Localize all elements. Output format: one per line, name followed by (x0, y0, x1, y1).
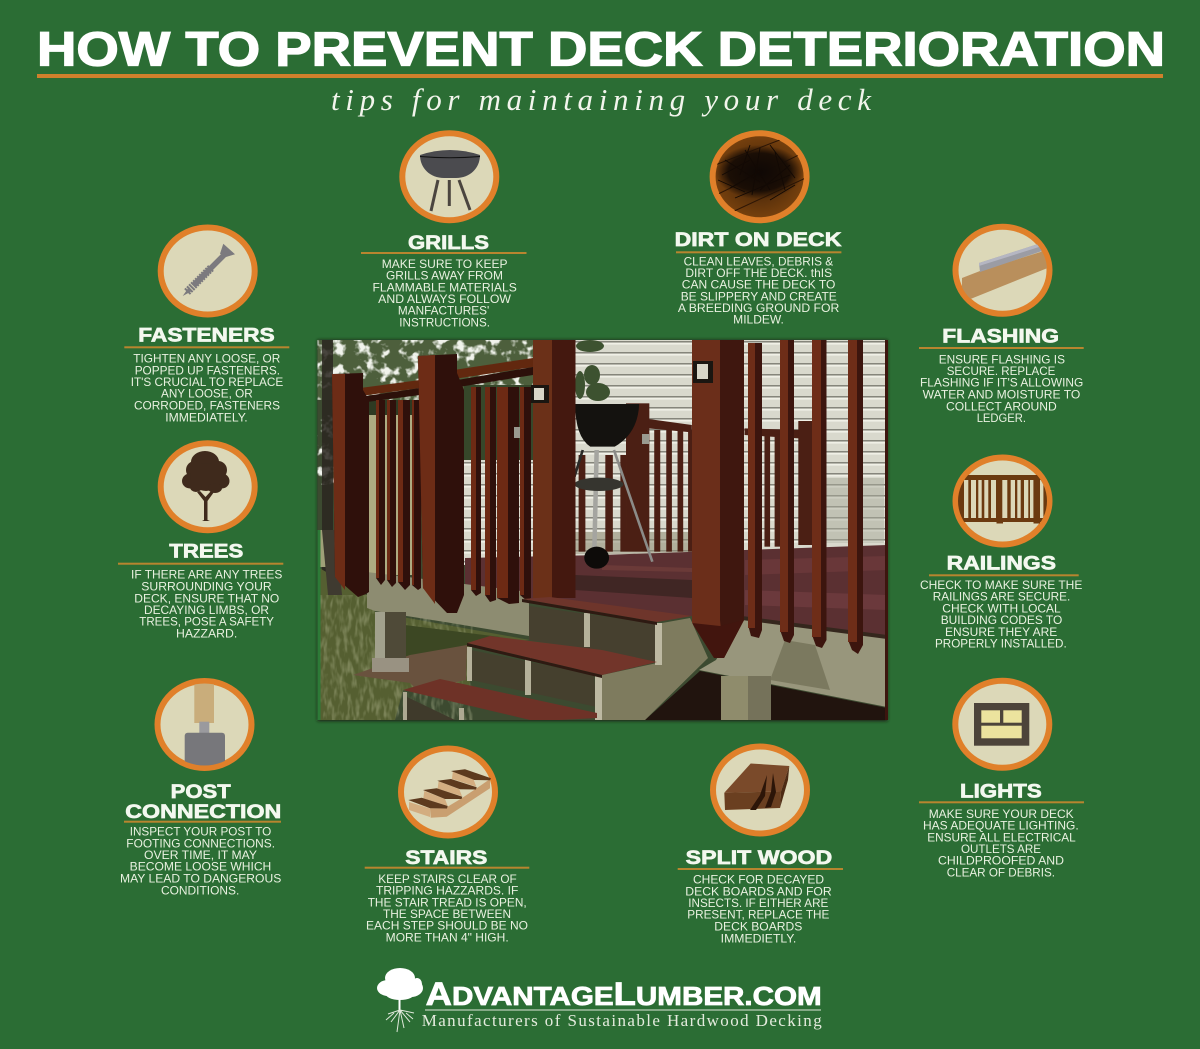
icon: dirt on planks (713, 133, 810, 220)
panel: split wood (678, 746, 843, 945)
text: trees tip: DECAYING LIMBS, OR (144, 603, 269, 617)
heading: flashing: FLASHING (942, 325, 1059, 347)
text: fasteners tip: IT'S CRUCIAL TO REPLACE (131, 375, 283, 389)
text: trees tip (131, 568, 282, 640)
text: fasteners tip: CORRODED, FASTENERS (134, 399, 280, 413)
icon: split board (713, 746, 807, 834)
text: split wood tip: INSECTS. IF EITHER ARE (688, 896, 828, 910)
grill (574, 404, 652, 569)
icon: screw (161, 228, 255, 314)
text: flashing tip: FLASHING IF IT'S ALLOWING (920, 376, 1083, 390)
text: split wood tip: PRESENT, REPLACE THE (687, 908, 829, 922)
siding (575, 340, 888, 560)
heading: lights: LIGHTS (960, 781, 1042, 803)
icon: deck light (955, 681, 1049, 768)
text: railings tip: CHECK TO MAKE SURE THE (920, 578, 1082, 592)
text: stairs tip: TRIPPING HAZZARDS. IF (376, 884, 518, 898)
text: flashing tip (920, 352, 1083, 425)
panel: flashing (919, 227, 1084, 425)
heading: dirt on deck: DIRT ON DECK (675, 229, 841, 251)
text: post tip: BECOME LOOSE WHICH (130, 860, 271, 874)
far railing (579, 403, 813, 552)
text: fasteners tip: POPPED UP FASTENERS. (135, 363, 280, 377)
text: dirt tip: A BREEDING GROUND FOR (678, 301, 840, 315)
logo: Advantage Lumber (377, 968, 822, 1032)
heading: stairs: STAIRS (405, 847, 487, 869)
text: fasteners tip: IMMEDIATELY. (165, 410, 248, 424)
text: split wood tip (685, 873, 832, 945)
heading: split wood: SPLIT WOOD (686, 847, 832, 869)
tagline: Manufacturers of Sustainable Hardwood Decking (422, 1011, 822, 1030)
tree trunk (322, 530, 342, 595)
icon: grill (402, 133, 496, 220)
panel: fasteners (124, 228, 289, 424)
text: fasteners tip: ANY LOOSE, OR (161, 387, 253, 401)
text: grills tip (372, 257, 517, 329)
text: split wood tip: CHECK FOR DECAYED (693, 873, 824, 887)
text: railings tip: CHECK WITH LOCAL (942, 601, 1061, 615)
near railing: left rails (345, 358, 533, 404)
text: fasteners tip: TIGHTEN ANY LOOSE, OR (133, 352, 281, 366)
support post and footing (372, 612, 409, 672)
title: HOW TO PREVENT DECK DETERIORATION (37, 22, 1165, 76)
text: dirt tip: CLEAN LEAVES, DEBRIS & (684, 254, 833, 268)
text: railings tip: ENSURE THEY ARE (945, 625, 1057, 639)
grass and ground (318, 567, 530, 720)
text: railings tip: RAILINGS ARE SECURE. (933, 590, 1070, 604)
text: lights tip: CLEAR OF DEBRIS. (947, 865, 1055, 879)
sprig of leaves (575, 340, 610, 401)
text: flashing tip: ENSURE FLASHING IS (939, 352, 1065, 366)
text: dirt tip: DIRT OFF THE DECK. thIS (685, 266, 832, 280)
text: post tip: MAY LEAD TO DANGEROUS (120, 871, 281, 885)
heading: railings: RAILINGS (947, 552, 1056, 574)
text: post tip: CONDITIONS. (161, 883, 239, 897)
panel: lights (919, 681, 1084, 879)
text: trees tip: TREES, POSE A SAFETY (139, 615, 274, 629)
subtitle: tips for maintaining your deck (331, 82, 872, 117)
panel: dirt on deck (675, 133, 841, 327)
near railing: balusters (376, 387, 531, 604)
text: split wood tip: IMMEDIETLY. (721, 931, 796, 945)
icon: railing (956, 458, 1050, 544)
text: trees tip: DECK, ENSURE THAT NO (134, 591, 279, 605)
text: trees tip: IF THERE ARE ANY TREES (131, 568, 282, 582)
text: dirt tip (678, 254, 840, 327)
photo: deck with railing, stairs and grill (318, 340, 888, 721)
text: post tip (120, 825, 281, 897)
icon: flashing on ledger (956, 227, 1050, 314)
text: stairs tip: EACH STEP SHOULD BE NO (366, 919, 528, 933)
text: stairs tip (366, 872, 528, 945)
icon: logo tree (377, 968, 423, 1032)
panel: trees (118, 443, 283, 640)
text: lights tip: HAS ADEQUATE LIGHTING. (923, 819, 1079, 833)
text: railings tip: BUILDING CODES TO (941, 613, 1062, 627)
text: railings tip (920, 578, 1082, 651)
text: fasteners tip (131, 352, 283, 424)
near railing: right balusters (748, 340, 888, 720)
text: dirt tip: BE SLIPPERY AND CREATE (681, 289, 837, 303)
icon: tree (161, 443, 255, 530)
text: railings tip: PROPERLY INSTALLED. (935, 637, 1067, 651)
heading: trees: TREES (169, 540, 243, 562)
text: flashing tip: WATER AND MOISTURE TO (923, 387, 1080, 401)
heading: grills: GRILLS (408, 232, 489, 254)
text: post tip: FOOTING CONNECTIONS. (126, 836, 275, 850)
text: flashing tip: COLLECT AROUND (946, 399, 1057, 413)
text: grills tip: AND ALWAYS FOLLOW (378, 292, 512, 306)
icon: stairs (401, 748, 495, 836)
wordmark: ADVANTAGE LUMBER.COM (426, 976, 822, 1012)
text: trees tip: SURROUNDING YOUR (141, 579, 272, 593)
joists (367, 572, 529, 636)
wall lights (514, 361, 713, 444)
text: post tip: OVER TIME, IT MAY (144, 848, 257, 862)
text: lights tip (923, 807, 1079, 879)
heading: post connection (125, 781, 281, 823)
panel: railings (920, 458, 1082, 651)
text: flashing tip: LEDGER. (977, 411, 1026, 425)
text: grills tip: MAKE SURE TO KEEP (382, 257, 508, 271)
text: dirt tip: CAN CAUSE THE DECK TO (682, 278, 835, 292)
text: dirt tip: MILDEW. (733, 313, 784, 327)
heading: post connection: CONNECTION (125, 801, 281, 823)
text: stairs tip: THE SPACE BETWEEN (383, 907, 511, 921)
stairs (403, 597, 708, 720)
text: grills tip: GRILLS AWAY FROM (386, 269, 503, 283)
text: lights tip: CHILDPROOFED AND (938, 854, 1064, 868)
panel: grills (361, 133, 526, 329)
text: post tip: INSPECT YOUR POST TO (130, 825, 271, 839)
text: flashing tip: SECURE. REPLACE (947, 364, 1055, 378)
text: grills tip: MANFACTURES' (398, 304, 489, 318)
text: stairs tip: KEEP STAIRS CLEAR OF (378, 872, 517, 886)
panel: post connection (120, 680, 281, 897)
text: lights tip: ENSURE ALL ELECTRICAL (927, 830, 1076, 844)
foliage (318, 340, 534, 485)
text: trees tip: HAZZARD. (176, 626, 237, 640)
text: grills tip: FLAMMABLE MATERIALS (372, 280, 517, 294)
near railing: posts (332, 340, 744, 658)
text: lights tip: MAKE SURE YOUR DECK (929, 807, 1074, 821)
text: grills tip: INSTRUCTIONS. (399, 315, 490, 329)
text: split wood tip: DECK BOARDS (714, 920, 802, 934)
icon: post and footing (158, 680, 252, 773)
text: lights tip: OUTLETS ARE (961, 842, 1041, 856)
deck floor (465, 545, 887, 637)
text: stairs tip: THE STAIR TREAD IS OPEN, (368, 895, 527, 909)
heading: fasteners: FASTENERS (138, 325, 275, 347)
text: stairs tip: MORE THAN 4" HIGH. (386, 931, 509, 945)
text: split wood tip: DECK BOARDS AND FOR (685, 884, 832, 898)
heading: post connection: POST (171, 781, 231, 803)
panel: stairs (365, 748, 529, 945)
